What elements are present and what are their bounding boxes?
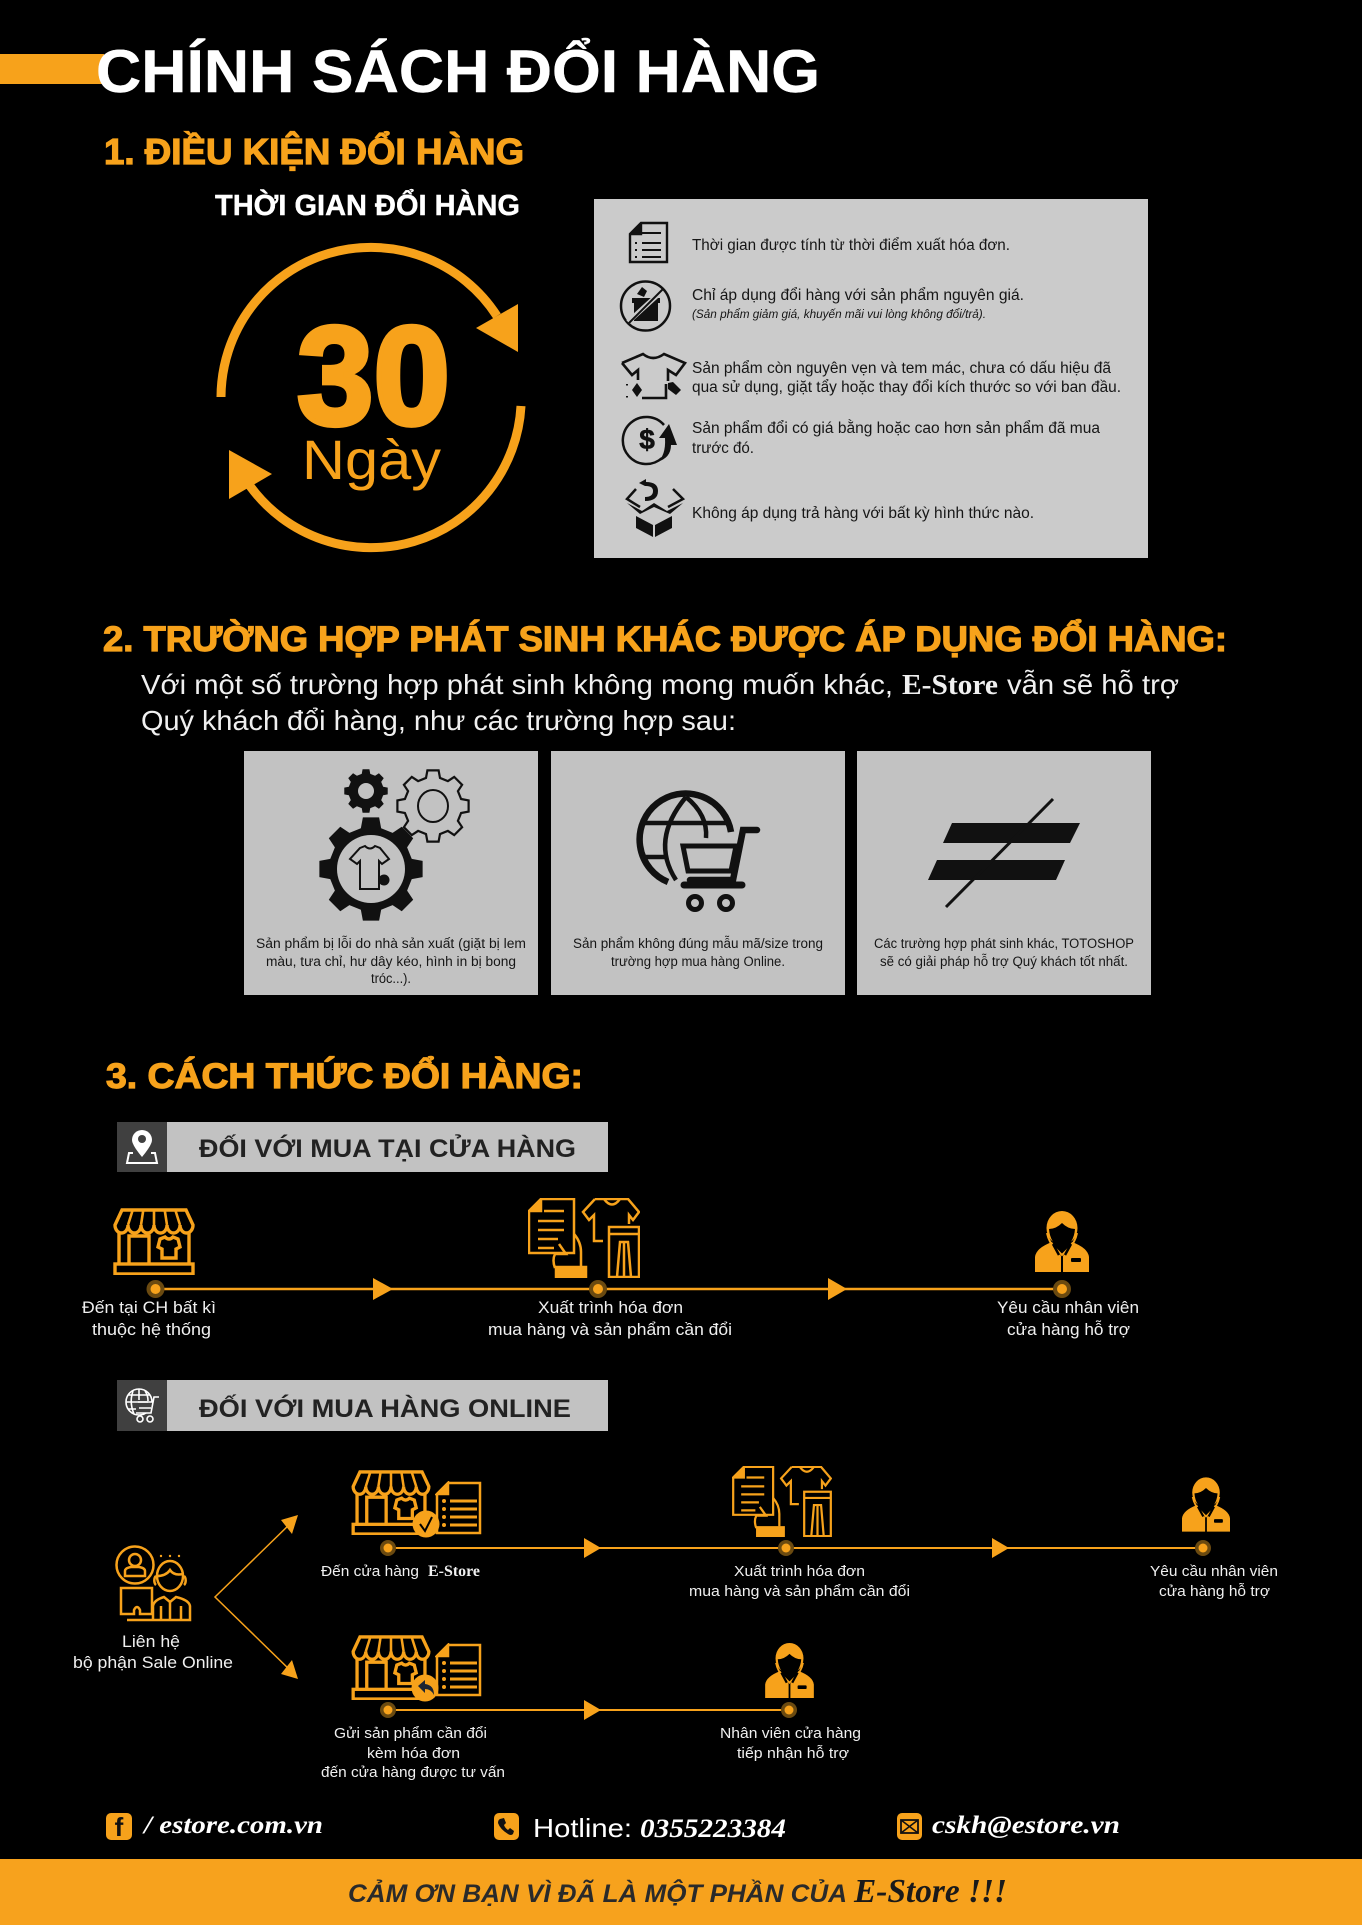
icon: facebook bbox=[106, 1812, 132, 1842]
icon: sale online contact bbox=[116, 1546, 190, 1620]
text: intact product condition: Sản phẩm còn nguyên vẹn và tem mác, chưa có dấu hiệu đã bbox=[692, 360, 1111, 377]
text: present invoice: mua hàng và sản phẩm cần đổi bbox=[488, 1320, 732, 1339]
node: step three bbox=[1195, 1540, 1211, 1556]
text: discount note: (Sản phẩm giảm giá, khuyến mãi vui lòng không đổi/trả). bbox=[692, 309, 986, 321]
arrow: step one to two bbox=[584, 1538, 601, 1558]
node: step one bbox=[380, 1702, 396, 1718]
panel: exchange conditions bbox=[594, 199, 1148, 558]
icon: staff bbox=[1182, 1477, 1230, 1532]
line bbox=[155, 1288, 1062, 1290]
icon: store bbox=[115, 1210, 193, 1274]
text: present invoice bbox=[488, 1298, 732, 1339]
text: staff receives bbox=[720, 1725, 861, 1762]
banner: in-store purchase bbox=[117, 1122, 608, 1172]
text: section 2 intro: E-Store bbox=[902, 669, 998, 701]
arrow: branch up and down bbox=[215, 1515, 298, 1679]
text: email address: cskh@estore.vn bbox=[932, 1812, 1120, 1839]
icon: invoice document bbox=[630, 223, 667, 262]
text: hotline number: 0355223384 bbox=[640, 1814, 786, 1843]
icon: facebook: f bbox=[115, 1812, 124, 1842]
label: days: Ngày bbox=[302, 428, 441, 491]
text: other cases description: sẽ có giải pháp hỗ trợ Quý khách tốt nhất. bbox=[880, 954, 1128, 969]
text: staff receives: tiếp nhận hỗ trợ bbox=[737, 1745, 849, 1762]
text: go to store: E-Store bbox=[428, 1563, 480, 1580]
text: other cases description bbox=[874, 936, 1134, 969]
text: staff receives: Nhân viên cửa hàng bbox=[720, 1725, 861, 1742]
text: contact sale online: bộ phận Sale Online bbox=[73, 1653, 233, 1672]
text: defect description: Sản phẩm bị lỗi do nhà sản xuất (giặt bị lem bbox=[256, 936, 526, 951]
icon: intact shirt bbox=[622, 354, 685, 398]
text: time counted from invoice: Thời gian được tính từ thời điểm xuất hóa đơn. bbox=[692, 237, 1010, 254]
node: step three bbox=[1053, 1280, 1071, 1298]
arrow: step one to two bbox=[584, 1700, 601, 1720]
icon: mail bbox=[897, 1813, 922, 1840]
arrow: lower arc bbox=[229, 406, 521, 548]
icon: store with returned invoice bbox=[353, 1637, 480, 1702]
text: send product with invoice: kèm hóa đơn bbox=[367, 1745, 460, 1762]
text: defect description: màu, tưa chỉ, hư dây kéo, hình in bị bong bbox=[266, 954, 516, 969]
text: hotline label: Hotline: bbox=[533, 1813, 632, 1843]
panel: manufacturing defect bbox=[244, 751, 538, 995]
text: brand: E-Store !!! bbox=[853, 1873, 1007, 1910]
text: contact sale online: Liên hệ bbox=[122, 1632, 180, 1651]
text: other cases description: Các trường hợp phát sinh khác, TOTOSHOP bbox=[874, 936, 1134, 951]
icon: staff bbox=[1035, 1211, 1089, 1272]
text: wrong size description bbox=[573, 936, 823, 969]
icon: invoice and clothes bbox=[529, 1199, 639, 1277]
text: thank you: CẢM ƠN BẠN VÌ ĐÃ LÀ MỘT PHẦN CỦA bbox=[348, 1878, 847, 1908]
contact: email bbox=[897, 1812, 1120, 1840]
line bbox=[388, 1709, 789, 1711]
icon: dollar up arrow bbox=[623, 417, 677, 464]
text: equal or higher price: Sản phẩm đổi có giá bằng hoặc cao hơn sản phẩm đã mua bbox=[692, 420, 1100, 437]
text: contact sale online bbox=[73, 1632, 233, 1672]
text: go to store: Đến cửa hàng bbox=[321, 1563, 419, 1580]
text: request staff support bbox=[997, 1298, 1139, 1339]
number 30: 30 bbox=[297, 297, 450, 454]
text: intact product condition line two: qua sử dụng, giặt tẩy hoặc thay đổi kích thước so với ban đầu. bbox=[692, 379, 1121, 396]
timeline: online option one bbox=[321, 1467, 1278, 1600]
text: go to any store bbox=[82, 1298, 216, 1339]
contact: hotline bbox=[494, 1813, 786, 1843]
label: in-store purchase: ĐỐI VỚI MUA TẠI CỬA HÀNG bbox=[199, 1133, 576, 1163]
text: present invoice bbox=[689, 1563, 910, 1600]
cycle graphic: 30 days bbox=[221, 247, 521, 548]
title: CHÍNH SÁCH ĐỔI HÀNG bbox=[96, 38, 820, 105]
icon: dollar up arrow: $ bbox=[639, 424, 655, 455]
timeline: online option two bbox=[321, 1637, 861, 1781]
heading: section 1: 1. ĐIỀU KIỆN ĐỔI HÀNG bbox=[104, 129, 524, 172]
node: step two bbox=[781, 1702, 797, 1718]
text: request staff support: Yêu cầu nhân viên bbox=[1150, 1563, 1278, 1580]
text: go to store bbox=[321, 1563, 480, 1580]
text: defect description bbox=[256, 936, 526, 986]
arrow: step two to three bbox=[992, 1538, 1009, 1558]
text: present invoice: mua hàng và sản phẩm cần đổi bbox=[689, 1583, 910, 1600]
icon: invoice and clothes bbox=[733, 1467, 831, 1536]
text: defect description: tróc...). bbox=[371, 971, 411, 986]
footer band bbox=[0, 1859, 1362, 1925]
text: request staff support: cửa hàng hỗ trợ bbox=[1159, 1583, 1270, 1600]
text: go to any store: Đến tại CH bất kì bbox=[82, 1298, 216, 1317]
text: request staff support: cửa hàng hỗ trợ bbox=[1007, 1320, 1130, 1339]
text: present invoice: Xuất trình hóa đơn bbox=[734, 1563, 865, 1580]
text: section 2 intro: Với một số trường hợp phát sinh không mong muốn khác, bbox=[141, 669, 893, 700]
subheading: exchange period: THỜI GIAN ĐỔI HÀNG bbox=[215, 188, 520, 222]
panel: wrong size online bbox=[551, 751, 845, 995]
arrow: step two to three bbox=[828, 1278, 847, 1300]
node: step one bbox=[380, 1540, 396, 1556]
node: step one bbox=[146, 1280, 164, 1298]
text: go to any store: thuộc hệ thống bbox=[92, 1320, 211, 1339]
text: send product with invoice: Gửi sản phẩm cần đổi bbox=[334, 1725, 487, 1742]
text: full price products only: Chỉ áp dụng đổi hàng với sản phẩm nguyên giá. bbox=[692, 287, 1024, 304]
arrow: upper arc bbox=[221, 247, 518, 397]
text: present invoice: Xuất trình hóa đơn bbox=[538, 1298, 683, 1317]
icon: staff bbox=[765, 1643, 814, 1698]
banner: online purchase bbox=[117, 1380, 608, 1431]
text: section 2 intro: vẫn sẽ hỗ trợ bbox=[1007, 669, 1179, 700]
icon: globe and shopping cart bbox=[640, 794, 757, 910]
text: equal or higher price line two: trước đó. bbox=[692, 440, 754, 457]
icon: no discounted products bbox=[621, 282, 670, 330]
text: no returns: Không áp dụng trả hàng với bất kỳ hình thức nào. bbox=[692, 505, 1034, 522]
text: facebook page: / estore.com.vn bbox=[142, 1812, 323, 1839]
text: section 2 intro: Quý khách đổi hàng, như các trường hợp sau: bbox=[141, 705, 736, 736]
label: online purchase: ĐỐI VỚI MUA HÀNG ONLINE bbox=[199, 1393, 571, 1423]
text: section 2 intro bbox=[141, 669, 1179, 736]
node: step two bbox=[589, 1280, 607, 1298]
icon: gears with shirt bbox=[319, 769, 469, 921]
text: request staff support: Yêu cầu nhân viên bbox=[997, 1298, 1139, 1317]
text: send product with invoice: đến cửa hàng được tư vấn bbox=[321, 1764, 505, 1781]
icon: not equal sign bbox=[928, 799, 1080, 907]
arrow: step one to two bbox=[373, 1278, 393, 1300]
panel: other cases bbox=[857, 751, 1151, 995]
text: wrong size description: Sản phẩm không đúng mẫu mã/size trong bbox=[573, 936, 823, 951]
text: send product with invoice bbox=[321, 1725, 505, 1781]
timeline: in-store steps bbox=[82, 1199, 1139, 1339]
title bar accent bbox=[0, 54, 104, 84]
text: wrong size description: trường hợp mua hàng Online. bbox=[611, 954, 785, 969]
heading: section 2: 2. TRƯỜNG HỢP PHÁT SINH KHÁC ĐƯỢC ÁP DỤNG ĐỔI HÀNG: bbox=[103, 619, 1227, 659]
node: step two bbox=[778, 1540, 794, 1556]
icon: globe cart bbox=[126, 1389, 159, 1422]
icon: returned box bbox=[627, 479, 683, 537]
icon: phone bbox=[494, 1813, 519, 1840]
icon: map pin bbox=[127, 1130, 157, 1163]
text: request staff support bbox=[1150, 1563, 1278, 1600]
contact: facebook bbox=[106, 1812, 323, 1842]
line bbox=[388, 1547, 1203, 1549]
heading: section 3: 3. CÁCH THỨC ĐỔI HÀNG: bbox=[106, 1056, 583, 1096]
icon: store with checked invoice bbox=[353, 1472, 480, 1538]
